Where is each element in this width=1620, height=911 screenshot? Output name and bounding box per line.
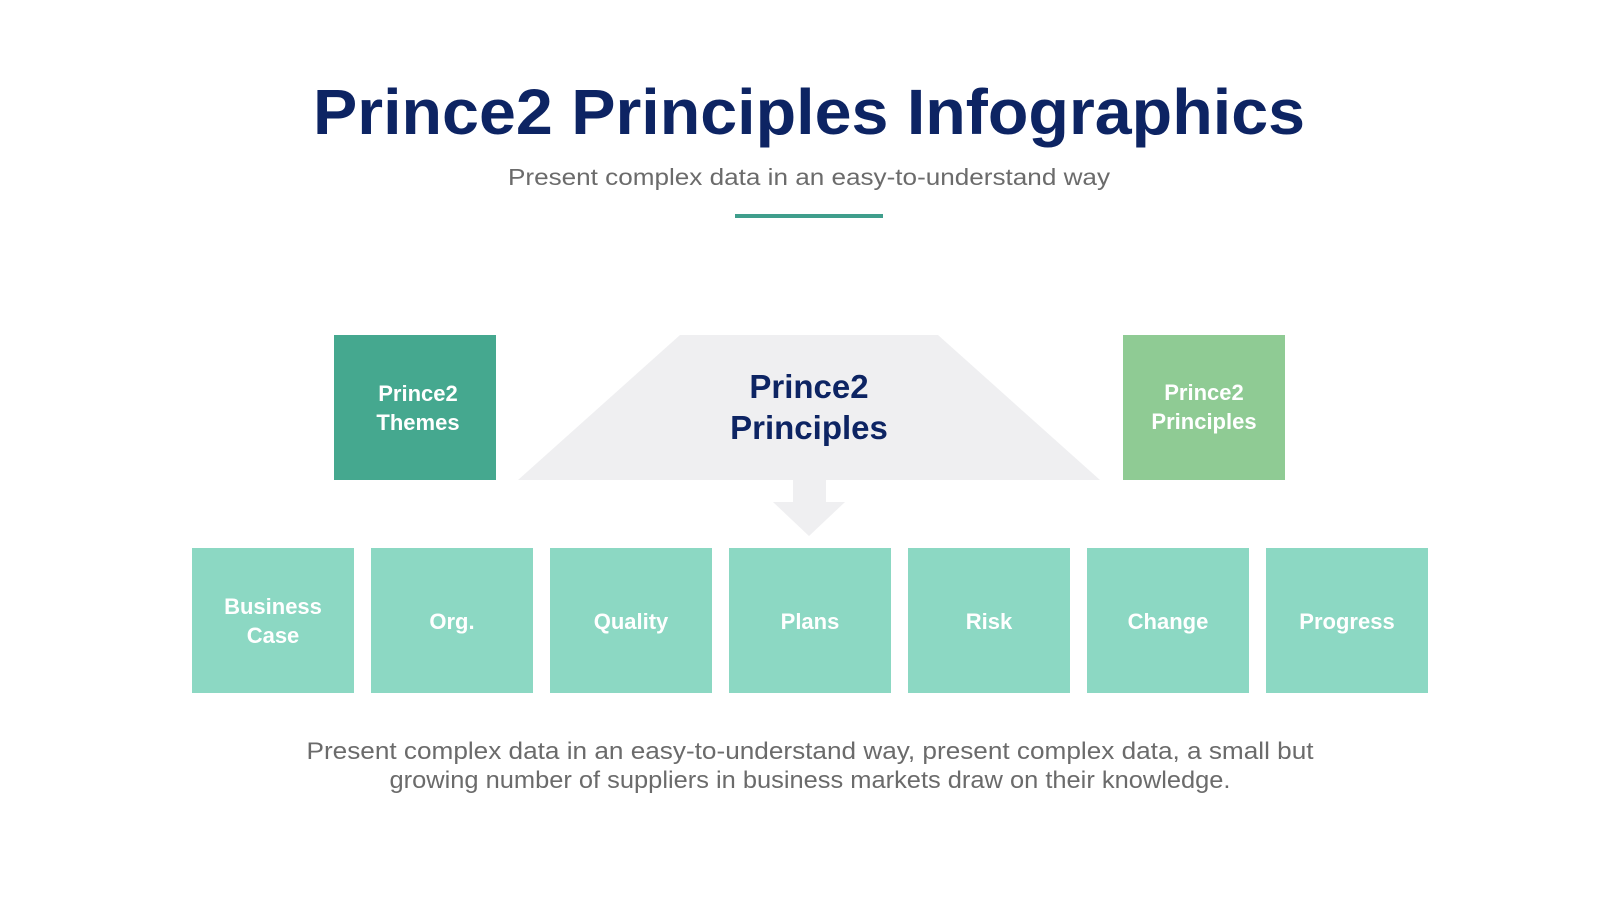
box: Quality: Quality <box>594 609 669 634</box>
body text: growing number of suppliers in business markets draw on their knowledge. <box>390 767 1230 794</box>
trapezoid: Prince2 Principles <box>518 335 1100 536</box>
box: Quality <box>550 548 712 693</box>
box: Progress <box>1266 548 1428 693</box>
box: Progress: Progress <box>1299 609 1395 634</box>
box: Business Case: Business <box>224 594 322 619</box>
box: Risk <box>908 548 1070 693</box>
box: Prince2 Themes <box>334 335 496 480</box>
arrow down <box>773 480 845 536</box>
box: Prince2 Principles: Principles <box>1151 409 1257 434</box>
box: Change: Change <box>1128 609 1208 634</box>
box: Business Case: Case <box>247 623 299 648</box>
title: Prince2 Principles Infographics <box>313 76 1305 148</box>
box: Prince2 Principles: Prince2 <box>1164 380 1244 405</box>
box: Change <box>1087 548 1249 693</box>
bottom row of principles <box>192 548 1428 693</box>
trapezoid: Prince2 Principles: Principles <box>730 409 888 446</box>
box: Business Case <box>192 548 354 693</box>
box: Org.: Org. <box>429 609 475 634</box>
subtitle: Present complex data in an easy-to-understand way <box>508 164 1111 190</box>
box: Prince2 Themes: Themes <box>376 410 460 435</box>
box: Plans: Plans <box>781 609 839 634</box>
body text <box>306 738 1314 794</box>
box: Prince2 Principles <box>1123 335 1285 480</box>
box: Org. <box>371 548 533 693</box>
box: Risk: Risk <box>966 609 1013 634</box>
box: Plans <box>729 548 891 693</box>
trapezoid: Prince2 Principles: Prince2 <box>749 368 869 405</box>
body text: Present complex data in an easy-to-understand way, present complex data, a small but <box>306 738 1314 765</box>
box: Prince2 Themes: Prince2 <box>378 381 458 406</box>
